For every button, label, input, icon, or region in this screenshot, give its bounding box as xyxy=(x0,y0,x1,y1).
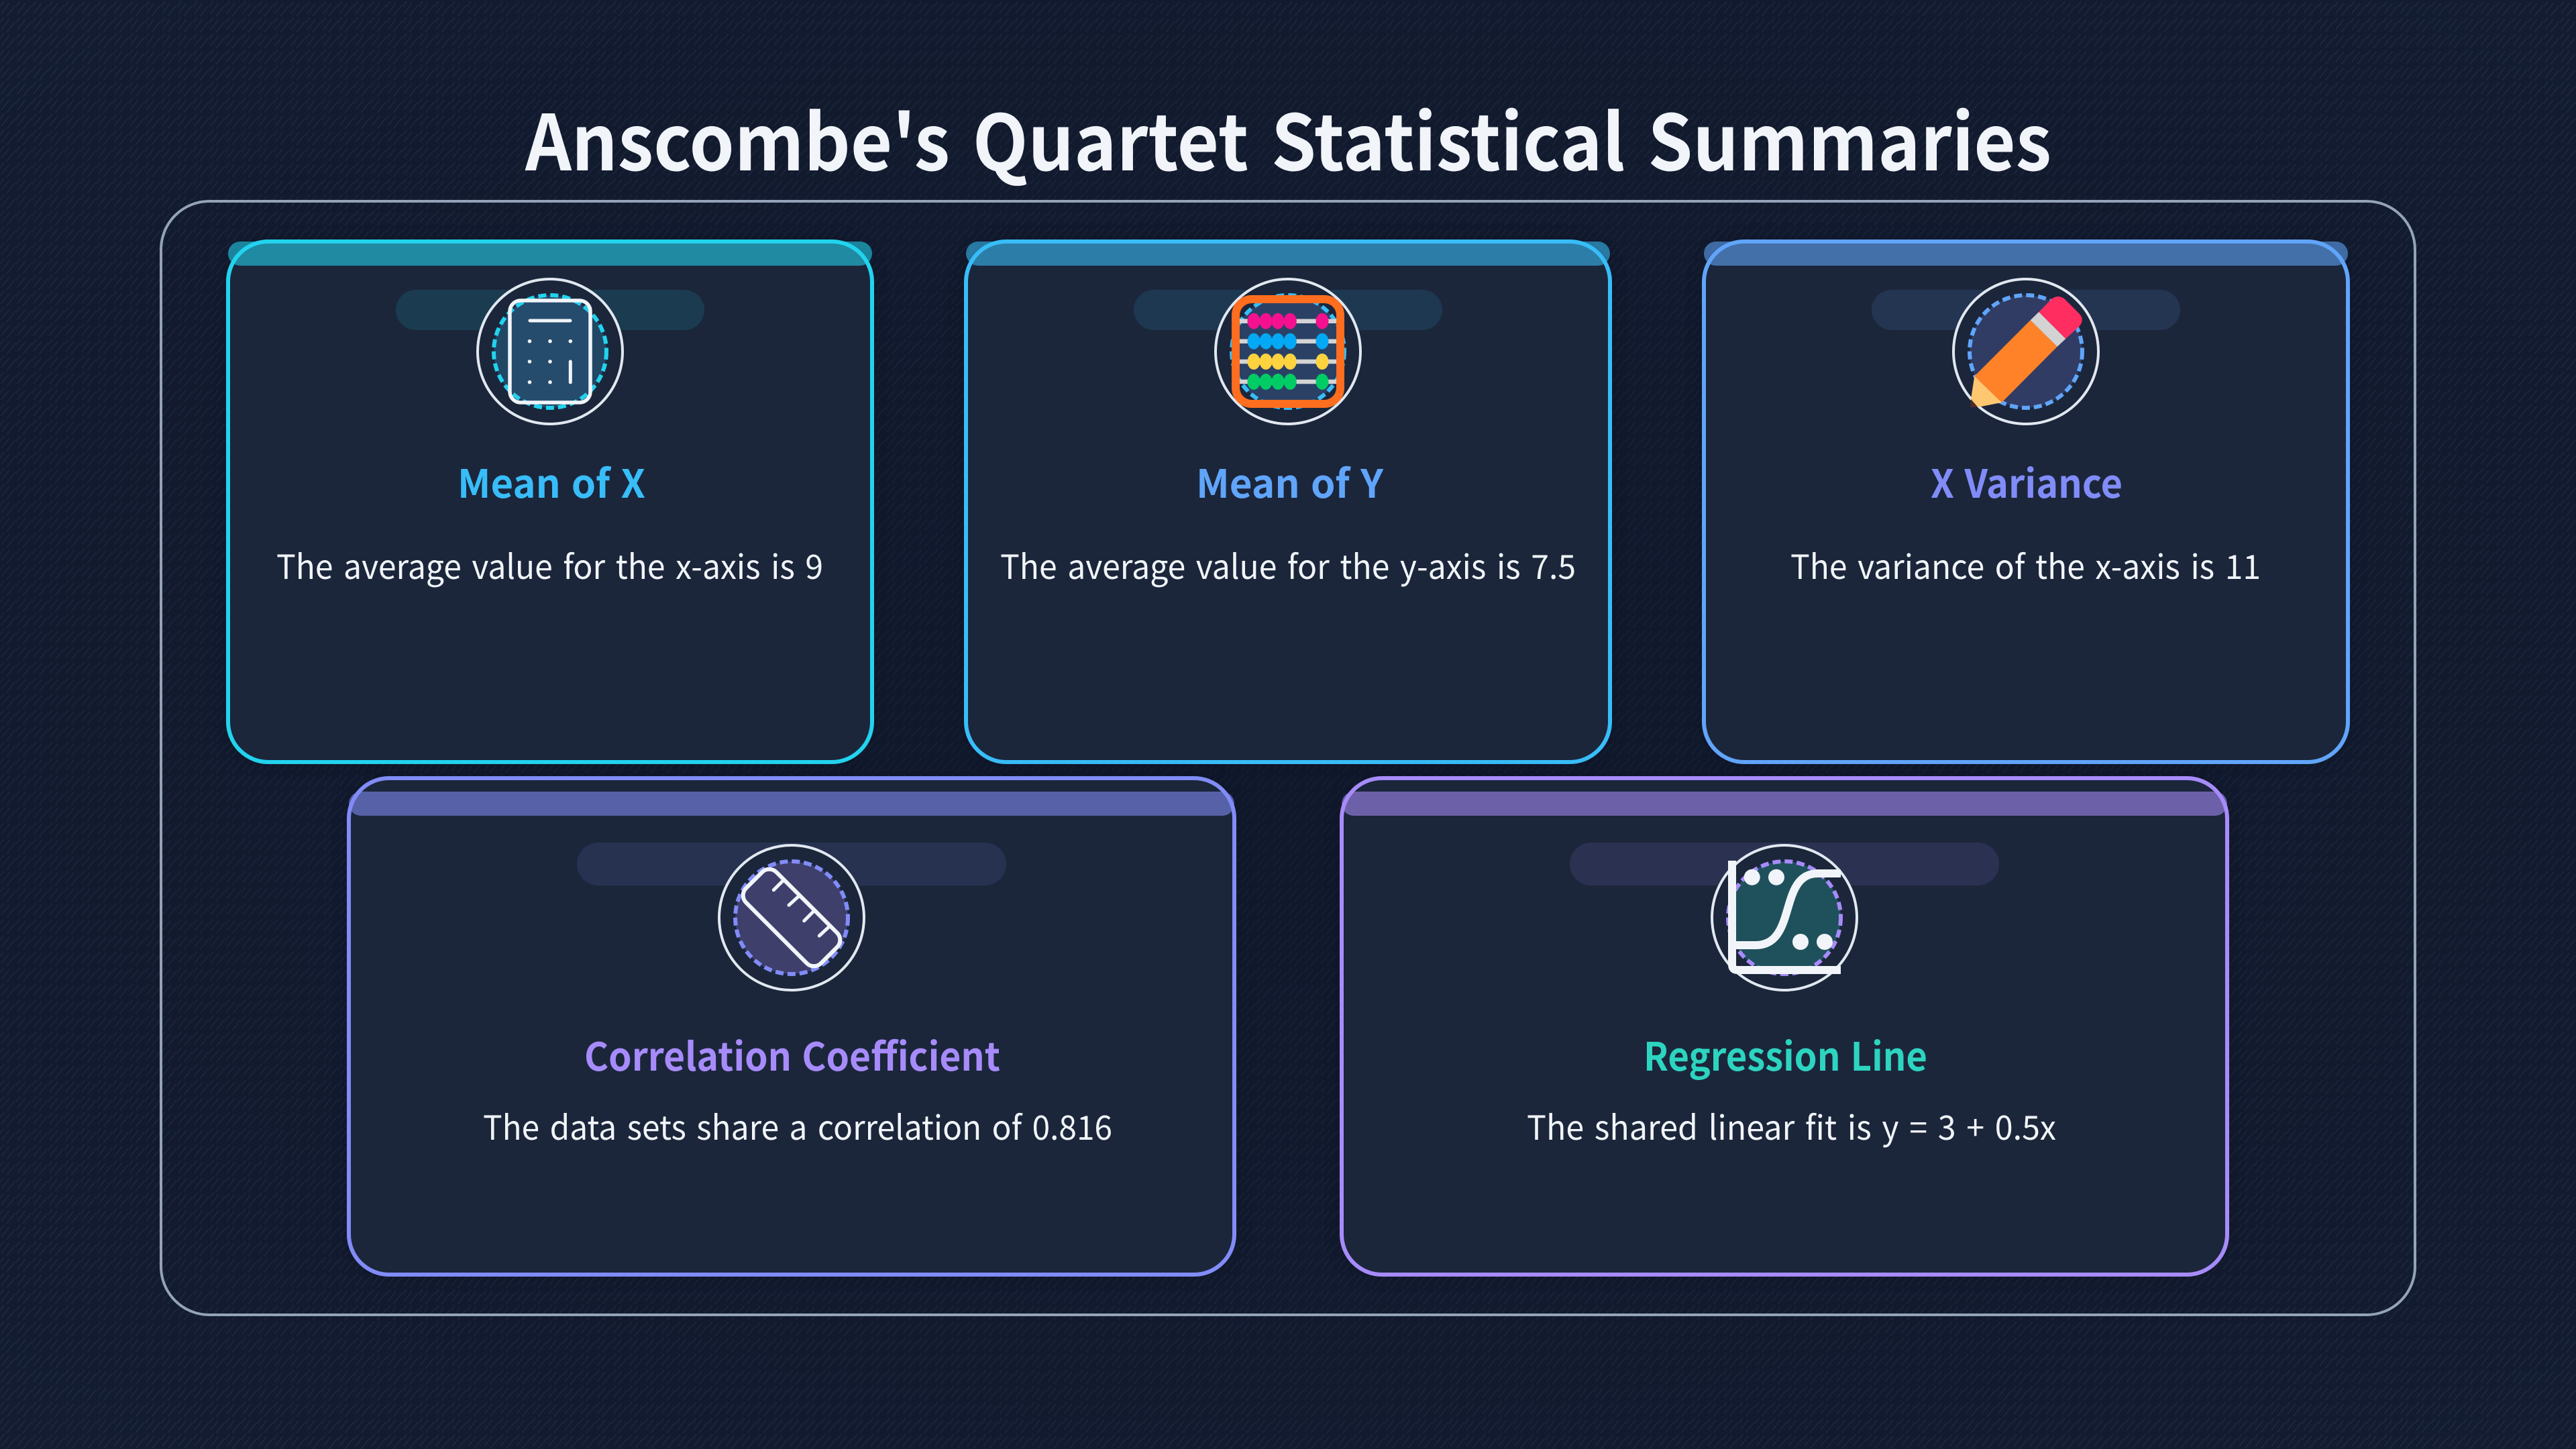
icon: abacus xyxy=(1216,279,1360,424)
text: correlation description: The data sets share a correlation of 0.816 xyxy=(483,1102,1112,1150)
heading: X Variance: X Variance xyxy=(1931,453,2123,509)
icon: calculator xyxy=(478,279,623,424)
text: X Variance description: The variance of the x-axis is 11 xyxy=(1790,541,2261,589)
panel: Mean of X card xyxy=(228,241,872,762)
heading: Mean of X: Mean of X xyxy=(458,453,645,509)
text: Mean of X description: The average value for the x-axis is 9 xyxy=(276,541,823,589)
heading: Regression Line: Regression Line xyxy=(1644,1026,1927,1082)
text: regression description: The shared linear fit is y = 3 + 0.5x xyxy=(1527,1102,2056,1150)
text: Mean of Y description: The average value for the y-axis is 7.5 xyxy=(1000,541,1576,589)
heading: Mean of Y: Mean of Y xyxy=(1196,453,1384,509)
icon: regression chart xyxy=(1712,845,1857,990)
panel: outer frame xyxy=(161,201,2415,1315)
heading: Correlation Coefficient: Correlation Coefficient xyxy=(584,1026,1000,1082)
icon: pencil xyxy=(1953,279,2098,424)
panel: Correlation Coefficient card xyxy=(349,778,1234,1275)
panel: X Variance card xyxy=(1704,241,2348,762)
title: Anscombe's Quartet Statistical Summaries xyxy=(525,82,2051,193)
panel: Regression Line card xyxy=(1342,778,2227,1275)
icon: ruler xyxy=(719,845,864,990)
panel: Mean of Y card xyxy=(966,241,1610,762)
